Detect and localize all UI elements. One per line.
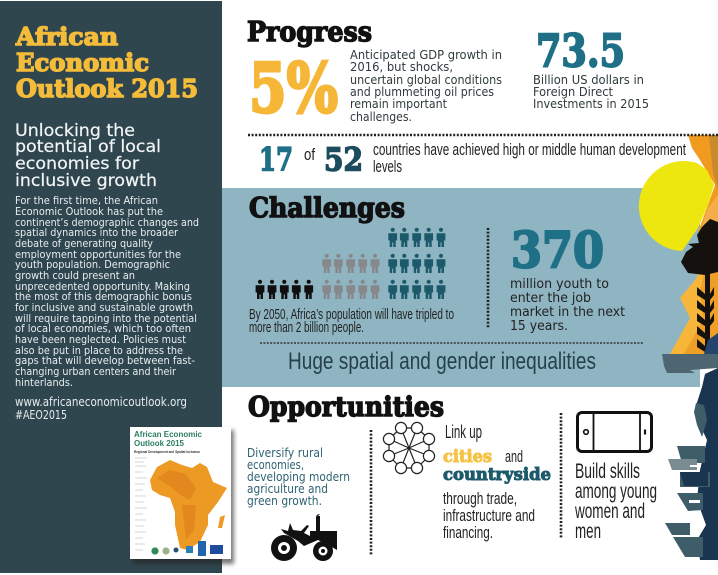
intro paragraph: the most of this demographic bonus [15,290,192,303]
text: diversify rural economies: Diversify rural [247,445,323,460]
text: link up cities and countryside [443,422,551,542]
stat: 370: 370 [511,220,604,280]
text: youth job market [510,277,625,334]
website and hashtag: www.africaneconomicoutlook.org [15,395,187,409]
intro paragraph: Economic Outlook has put the [15,205,163,218]
stat row: 17 of 52 countries: of [304,145,315,164]
heading: opportunities: Opportunities [248,392,444,423]
section: opportunities [247,392,657,561]
subtitle [15,121,161,191]
intro paragraph: changing urban centers and their [15,365,176,378]
title: African [15,22,118,51]
intro paragraph [15,194,199,389]
icon: tractor [271,514,337,561]
text: build skills: women and [574,500,645,523]
stat row: 17 of 52 countries: levels [373,157,402,176]
text: link up cities and countryside: through trade, [443,489,517,508]
intro paragraph: continent’s demographic changes and [15,216,199,229]
intro paragraph: also be put in place to address the [15,344,183,357]
text: diversify rural economies: green growth. [247,493,322,508]
intro paragraph: for inclusive and sustainable growth [15,301,193,314]
text: gdp growth: and plummeting oil prices [350,84,494,99]
intro paragraph: gaps that will develop between fast- [15,354,195,367]
text: gdp growth: Anticipated GDP growth in [350,47,502,62]
stat row: 17 of 52 countries: 52 [324,140,363,178]
panel: challenges band [222,188,700,387]
text: gdp growth: challenges. [350,109,412,124]
text: build skills [574,460,657,543]
intro paragraph: of local economies, which too often [15,322,191,335]
text: foreign investment [533,72,649,111]
report cover [130,427,234,564]
intro paragraph: have been neglected. Policies must [15,333,187,346]
text: diversify rural economies: developing modern [247,469,350,484]
intro paragraph: For the first time, the African [15,194,158,207]
text: link up cities and countryside: financing. [443,523,493,542]
text: population 2050: more than 2 billion people. [249,320,364,336]
icon: network [383,422,435,474]
decoration: dark skyline [662,333,718,560]
text: diversify rural economies: economies, [247,457,304,472]
text: gdp growth: remain important [350,96,447,111]
decoration: upper mountain shade [709,135,718,190]
decoration: orange mountains upper [688,135,718,232]
title [15,22,198,103]
text: build skills: Build skills [575,460,640,483]
text: foreign investment: Billion US dollars in [533,72,644,87]
stat row: 17 of 52 countries: 17 [259,140,293,178]
text: link up cities and countryside: and [505,447,523,466]
text: link up cities and countryside: countryside [443,465,551,485]
text: gdp growth [350,47,502,124]
stat: 73.5: 73.5 [536,24,625,78]
section: challenges [249,193,643,375]
decoration: yellow sun [639,161,714,251]
text: population 2050 [249,307,454,336]
text: population 2050: By 2050, Africa’s population will have tripled to [249,307,454,323]
intro paragraph: youth population. Demographic [15,258,170,271]
section: progress [247,17,649,129]
intro paragraph: employment opportunities for the [15,248,181,261]
text: link up cities and countryside: infrastructure and [443,506,535,525]
text: youth job market: market in the next [510,305,625,320]
text: build skills: among young [575,480,657,503]
heading: challenges: Challenges [249,193,405,224]
text: youth job market: enter the job [510,291,591,306]
text: diversify rural economies [247,445,350,508]
subtitle: Unlocking the [15,121,135,141]
website and hashtag [15,395,187,422]
report cover: Regional Development and Spatial Inclusion [134,450,200,454]
text: link up cities and countryside: Link up [445,422,482,442]
text: gdp growth: 2016, but shocks, [350,59,453,74]
text: youth job market: million youth to [510,277,609,292]
text: gdp growth: uncertain global conditions [350,72,502,87]
text: spatial inequalities: Huge spatial and gender inequalities [288,348,596,375]
decoration: lower mountain shade [684,262,718,354]
panel: left sidebar [0,1,222,573]
title: Outlook 2015 [16,74,198,103]
text: link up cities and countryside: cities [443,447,492,467]
intro paragraph: debate of generating quality [15,237,153,250]
pictogram: population today [256,280,313,299]
text: foreign investment: Foreign Direct [533,84,613,99]
intro paragraph: will require tapping into the potential [15,312,197,325]
subtitle: economies for [15,154,139,174]
subtitle: potential of local [15,137,161,157]
text: youth job market: 15 years. [510,319,568,334]
report cover: African Economic [134,429,202,439]
decoration: lower orange mountains [670,260,718,354]
text: foreign investment: Investments in 2015 [533,96,649,111]
intro paragraph: growth could present an [15,269,135,282]
website and hashtag: #AEO2015 [15,408,67,422]
decoration: light orange ridge [700,195,718,232]
subtitle: inclusive growth [15,171,157,191]
intro paragraph: hinterlands. [15,376,73,389]
heading: progress: Progress [247,17,372,48]
decoration: black tower silhouette [681,219,718,354]
report cover: Outlook 2015 [134,438,184,448]
stat row: 17 of 52 countries [259,140,686,178]
pictogram: population growing [322,254,379,299]
title: Economic [16,48,149,77]
pictogram: population tripled [388,228,445,299]
stat: 5 percent: 5% [249,49,338,129]
intro paragraph: spatial dynamics into the broader [15,226,178,239]
text: build skills: men [575,520,601,543]
text: diversify rural economies: agriculture and [247,481,328,496]
icon: phone [578,412,652,452]
intro paragraph: unprecedented opportunity. Making [15,280,190,293]
